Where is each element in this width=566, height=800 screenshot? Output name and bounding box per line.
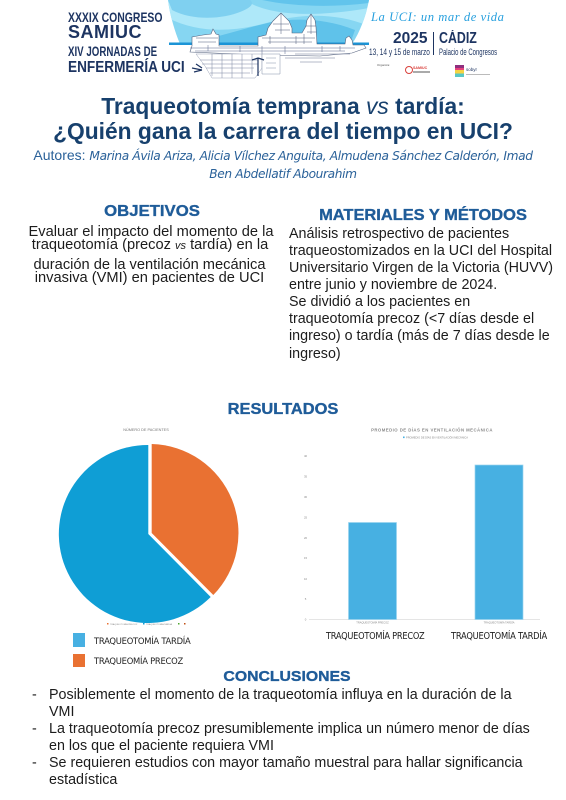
congress name: SAMIUC [68, 22, 142, 42]
text: materiales y métodos: ingreso) [289, 346, 341, 362]
date and venue: 2025 [393, 30, 427, 47]
slogan: La UCI: un mar de vida [371, 10, 504, 24]
date and venue: Palacio de Congresos [439, 47, 497, 57]
text: materiales y métodos: Universitario Virgen de la Victoria (HUVV) [289, 260, 553, 276]
congress name [68, 9, 185, 76]
chart legend [107, 623, 186, 626]
y axis labels: 0 [305, 618, 307, 622]
congress name: XXXIX CONGRESO [68, 9, 162, 25]
y axis labels: 40 [304, 454, 307, 458]
text: materiales y métodos: Se dividió a los pacientes en [289, 294, 470, 310]
y axis labels [304, 454, 307, 622]
date and venue: CÁDIZ [439, 30, 477, 47]
bar: traqueotomía tardía [475, 465, 523, 620]
text: objetivos: invasiva (VMI) en pacientes de UCI [35, 270, 264, 286]
text: materiales y métodos [289, 226, 553, 362]
organisers: Organiza: [377, 62, 390, 66]
organisers [377, 62, 490, 77]
organisers: sobyr [466, 67, 477, 72]
date and venue [369, 30, 497, 57]
chart title: NÚMERO DE PACIENTES [123, 427, 169, 432]
icon: SAMIUC logo [405, 66, 413, 74]
congress name: XIV JORNADAS DE [68, 44, 157, 59]
text: objetivos: duración de la ventilación mecánica [34, 256, 265, 272]
y axis labels: 35 [304, 474, 307, 478]
list: conclusiones [32, 687, 530, 788]
list: conclusiones: La traqueotomía precoz presumiblemente implica un número menor de días [49, 721, 530, 737]
bar: traqueotomía precoz [348, 522, 396, 620]
x axis labels: TRAQUEOTOMÍA PRECOZ [356, 620, 389, 624]
list: conclusiones: - [32, 687, 37, 703]
authors [33, 147, 533, 181]
list: conclusiones: - [32, 755, 37, 771]
y axis labels: 5 [305, 597, 307, 601]
authors: Ben Abdellatif Abourahim [209, 167, 357, 181]
chart legend: TRAQUEOTOMÍA TARDÍA [146, 623, 173, 626]
legend: traqueotomía precoz: TRAQUEOMÍA PRECOZ [94, 656, 183, 666]
authors: Autores: Marina Ávila Ariza, Alicia Vílchez Anguita, Almudena Sánchez Calderón, Imad [33, 147, 533, 163]
y axis labels: 20 [304, 536, 307, 540]
congress name: ENFERMERÍA UCI [68, 58, 185, 76]
label: traqueotomía precoz: TRAQUEOTOMÍA PRECOZ [326, 631, 424, 642]
heading: resultados: RESULTADOS [228, 401, 338, 418]
organisers: SAMIUC [413, 66, 427, 70]
heading: objetivos: OBJETIVOS [104, 203, 199, 220]
list: conclusiones: Se requieren estudios con mayor tamaño muestral para hallar significancia [49, 755, 523, 771]
y axis labels: 15 [304, 556, 307, 560]
text: materiales y métodos: entre junio y noviembre de 2024. [289, 277, 497, 293]
list: conclusiones: VMI [49, 704, 74, 720]
axis [309, 618, 540, 620]
x axis labels [356, 620, 515, 624]
title: ¿Quién gana la carrera del tiempo en UCI? [53, 118, 513, 144]
date and venue: 13, 14 y 15 de marzo [369, 47, 430, 57]
icon: sedar logo [455, 65, 464, 77]
title: Traqueotomía temprana vs tardía: [101, 93, 465, 119]
list: conclusiones: estadística [49, 772, 117, 788]
y axis labels: 25 [304, 516, 307, 520]
list: conclusiones: en los que el paciente requiera VMI [49, 738, 274, 754]
text: materiales y métodos: traqueostomizados en la UCI del Hospital [289, 243, 552, 259]
heading: materiales y métodos: MATERIALES Y MÉTODOS [319, 207, 527, 224]
list: conclusiones: - [32, 721, 37, 737]
pie chart: número de pacientes [58, 427, 238, 626]
chart title: PROMEDIO DE DÍAS EN VENTILACIÓN MECÁNICA [371, 428, 493, 432]
chart legend: PROMEDIO DE DÍAS EN VENTILACIÓN MECÁNICA [406, 434, 468, 439]
y axis labels: 10 [304, 577, 307, 581]
label: traqueotomía tardía: TRAQUEOTOMÍA TARDÍA [451, 631, 547, 642]
text: objetivos: Evaluar el impacto del momento de la [29, 224, 273, 240]
y axis labels: 30 [304, 495, 307, 499]
header banner [68, 0, 504, 78]
lower town: buildings and palms [196, 54, 262, 78]
legend: traqueotomía tardía [73, 633, 191, 647]
chart legend: TRAQUEOTOMÍA PRECOZ [110, 623, 138, 626]
title [53, 93, 513, 144]
text: objetivos [29, 224, 274, 286]
upper skyline: left church and cathedral [190, 13, 366, 56]
text: materiales y métodos: ingreso) o tardía (más de 7 días desde le [289, 328, 550, 344]
slice: traqueotomía tardía [59, 445, 211, 623]
bar chart: promedio de días en ventilación mecánica [304, 427, 540, 624]
legend: traqueotomía tardía: TRAQUEOTOMÍA TARDÍA [94, 636, 190, 646]
list: conclusiones: Posiblemente el momento de la traqueotomía influya en la duración de la [49, 687, 512, 703]
slice: traqueotomía precoz [152, 444, 238, 595]
text: materiales y métodos: Análisis retrospectivo de pacientes [289, 226, 509, 242]
legend: traqueotomía precoz [73, 654, 183, 667]
x axis labels: TRAQUEOTOMÍA TARDÍA [484, 620, 515, 624]
chart legend [403, 434, 468, 439]
illustration: Cádiz skyline over blue waves [168, 0, 369, 78]
heading: conclusiones: CONCLUSIONES [223, 669, 350, 685]
text: materiales y métodos: traqueotomía precoz (<7 días desde el [289, 311, 534, 327]
text: objetivos: traqueotomía (precoz vs tardía) en la [32, 236, 268, 252]
